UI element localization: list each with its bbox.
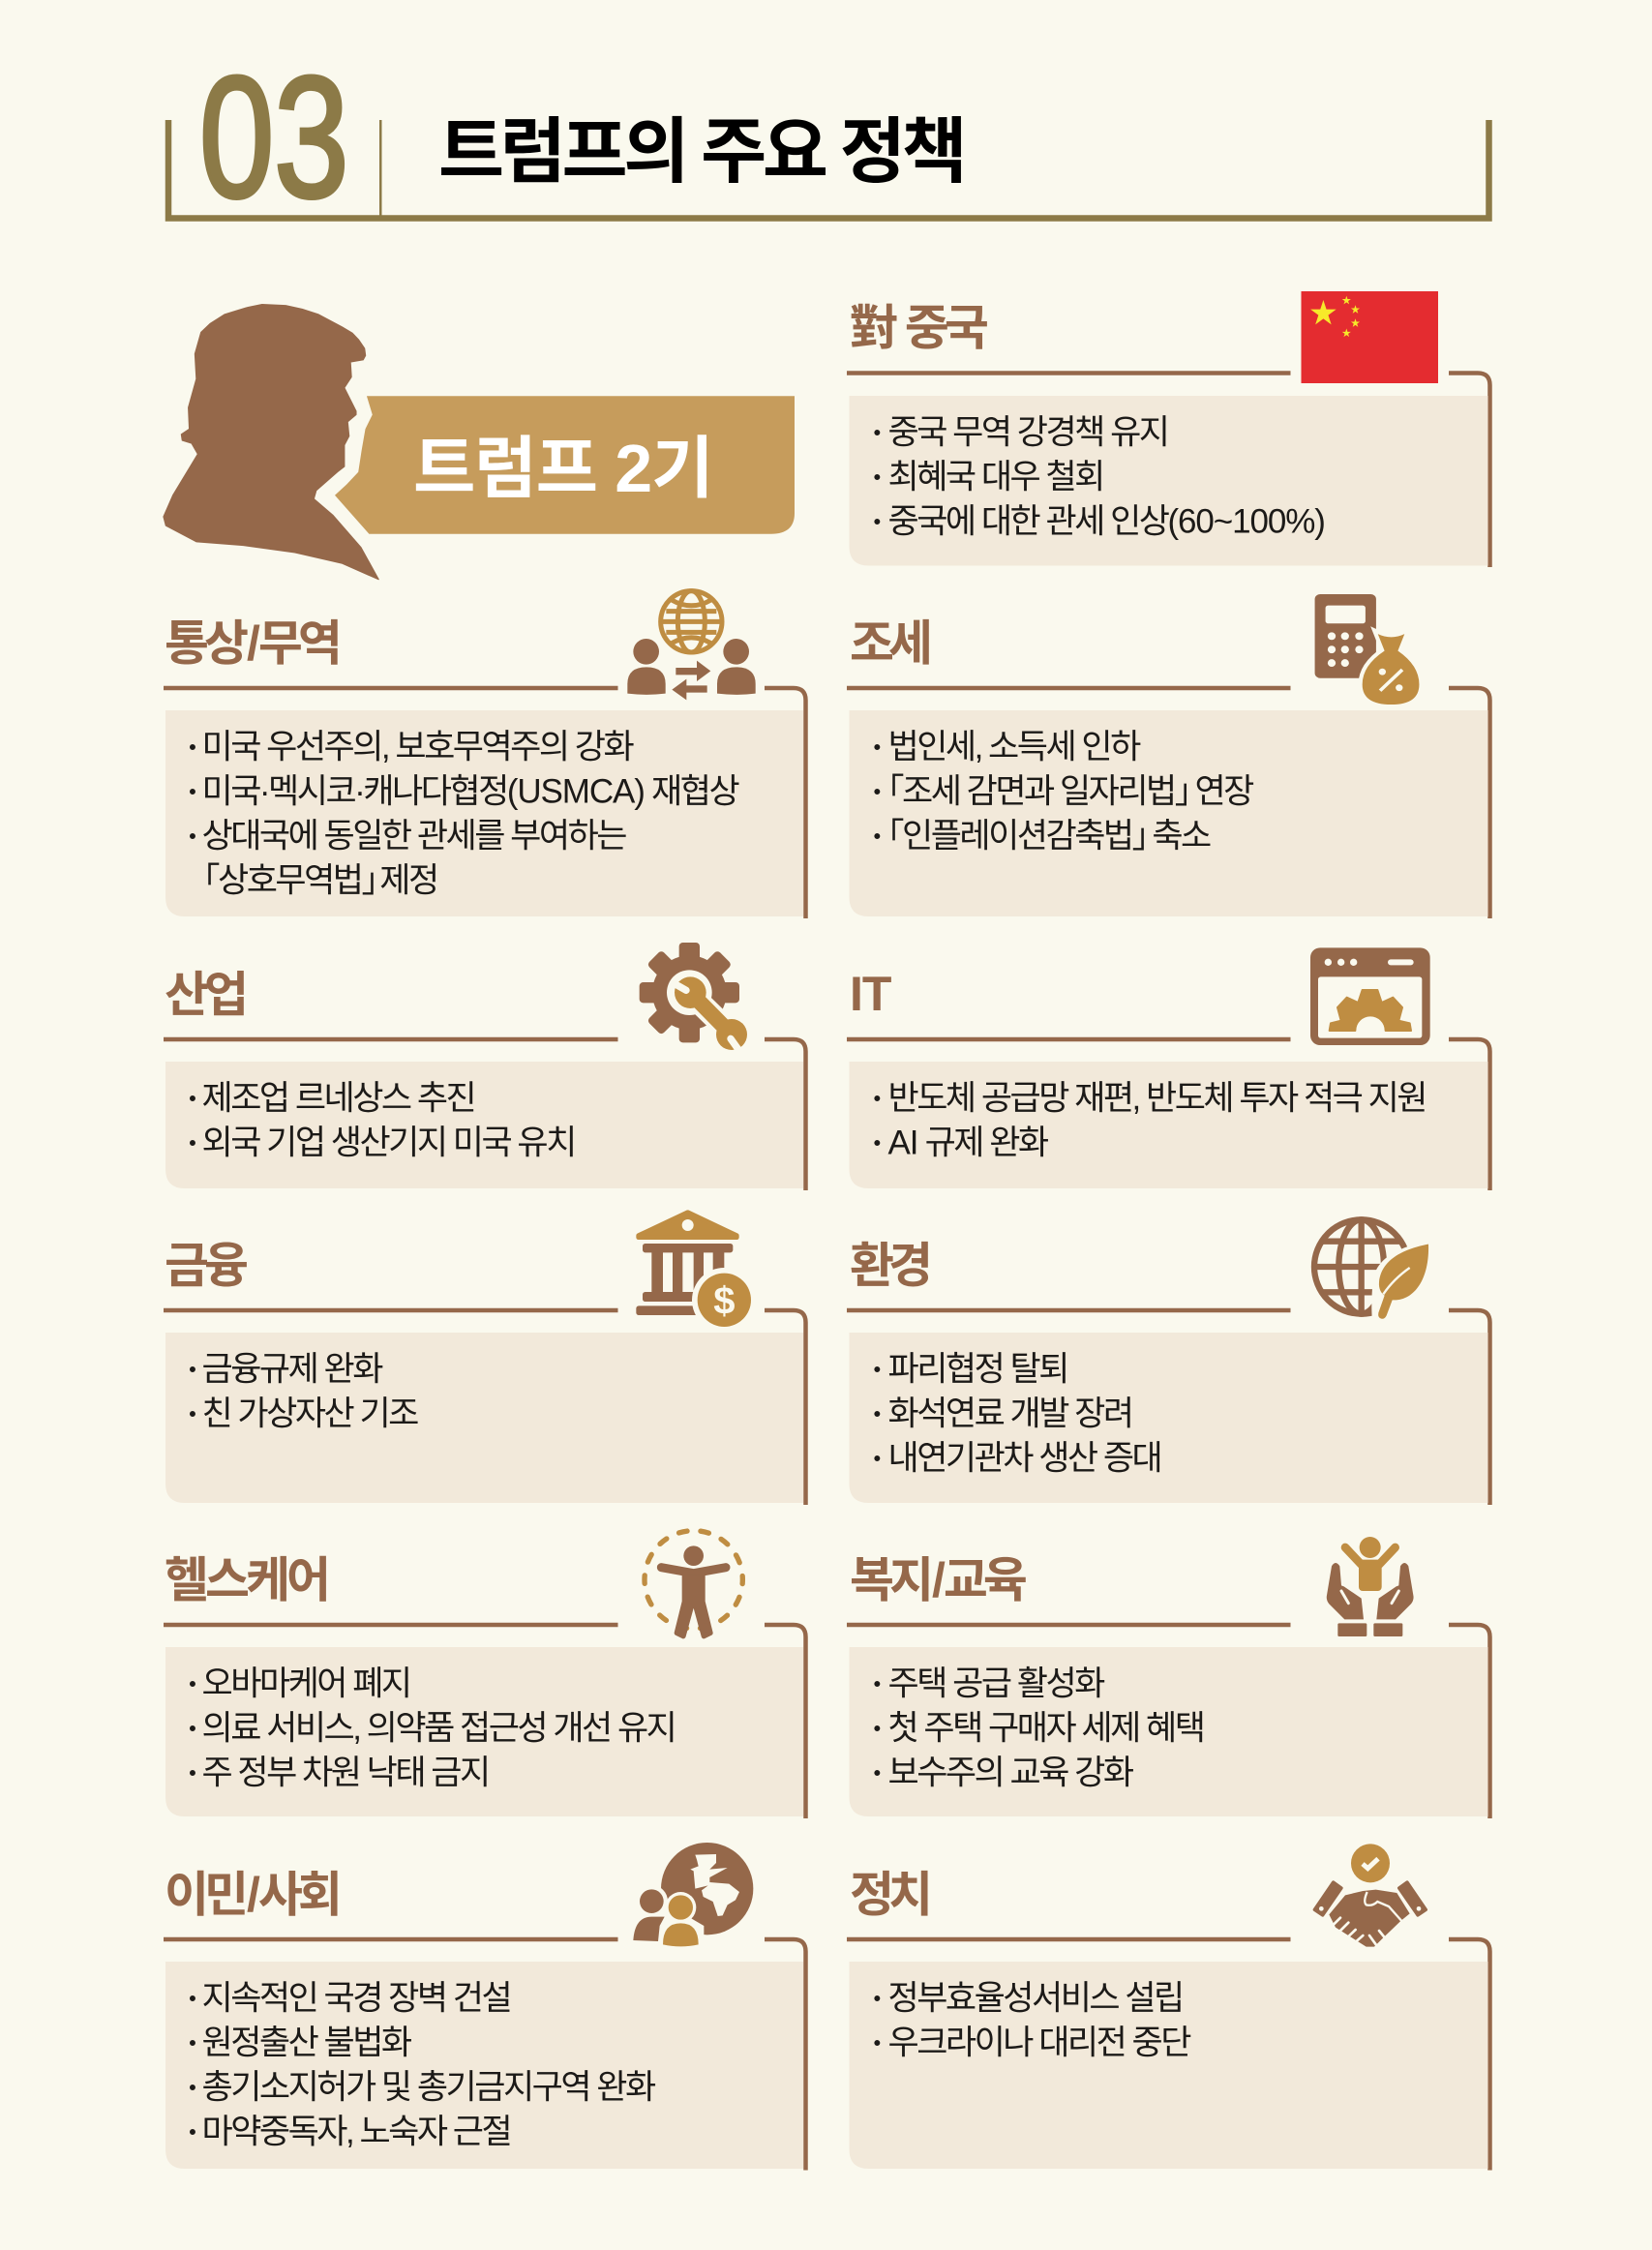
policy list: 지속적인 국경 장벽 건설 [201,1980,510,2017]
policy list: 「상호무역법」 제정 [186,861,437,900]
heading: 對 중국 [850,301,987,355]
icon: globe and people [628,1843,753,1952]
policy list: • [873,1401,881,1426]
panel: finance [164,1213,805,1505]
icon: gear and wrench [640,943,747,1050]
banner: Trump second term [164,305,795,580]
icon: globe and leaf [1314,1219,1432,1324]
panel: environment [847,1219,1490,1505]
policy list: 의료 서비스, 의약품 접근성 개선 유지 [201,1709,675,1748]
policy list: • [873,1446,881,1471]
text box [850,1962,1488,2169]
banner label: 트럼프 2기 [413,431,712,506]
policy list: 마약중독자, 노숙자 근절 [201,2114,510,2150]
panel: trade [164,591,805,918]
policy list: • [189,2030,196,2055]
heading: 정치 [850,1868,928,1922]
policy list: • [873,1761,881,1785]
policy list [873,1080,1426,1161]
panel: politics [847,1844,1490,2170]
policy list: 미국 우선주의, 보호무역주의 강화 [201,728,634,766]
policy list: • [873,2030,881,2055]
policy list: 금융규제 완화 [201,1351,383,1388]
heading: 헬스케어 [165,1553,327,1607]
policy list: • [873,465,881,490]
policy list: 주택 공급 활성화 [888,1665,1105,1703]
panel: industry [164,943,805,1190]
policy list: 오바마케어 폐지 [201,1665,410,1703]
policy list: • [873,735,881,759]
panel: IT [847,947,1490,1190]
text box [165,1962,803,2169]
policy list: 보수주의 교육 강화 [888,1754,1134,1792]
banner shape [335,396,795,534]
policy list: 제조업 르네상스 추진 [201,1080,474,1117]
policy list [189,1351,418,1432]
policy list: 첫 주택 구매자 세제 혜택 [888,1709,1203,1748]
policy list [873,1980,1190,2061]
icon: bank and coin: $ [713,1279,735,1322]
panel: welfare and education [847,1537,1490,1818]
policy list: • [189,1717,196,1740]
policy list [186,728,738,900]
heading rule [847,1310,1490,1505]
heading: 복지/교육 [850,1553,1026,1607]
panel: healthcare [164,1531,805,1818]
silhouette portrait [164,305,378,580]
icon: browser and gear [1310,947,1430,1045]
header [168,41,1488,233]
policy list: 상대국에 동일한 관세를 부여하는 [201,817,626,855]
policy list [189,1980,656,2150]
heading: 이민/사회 [165,1868,338,1922]
policy list: • [873,420,881,445]
policy list: 내연기관차 생산 증대 [888,1440,1160,1477]
policy list: 최혜국 대우 철회 [888,459,1103,495]
heading rule [164,1625,805,1818]
icon: bank and coin [636,1213,757,1333]
policy list: 총기소지허가 및 총기금지구역 완화 [201,2069,656,2106]
heading rule [847,1625,1490,1818]
policy list: 반도체 공급망 재편, 반도체 투자 적극 지원 [888,1080,1426,1117]
policy list: • [873,1986,881,2011]
policy list [871,728,1253,855]
policy list: • [189,1357,196,1382]
policy list: • [189,2075,196,2100]
icon: China flag [1301,291,1438,383]
policy list: • [873,1130,881,1155]
policy list [873,1665,1203,1792]
policy list [189,1665,675,1792]
icon: hands holding child [1327,1537,1414,1636]
text box [850,396,1488,565]
heading rule [164,1310,805,1505]
icon: calculator and money bag [1315,594,1419,705]
policy list: • [873,825,881,848]
header divider [379,120,381,217]
heading: IT [850,967,891,1021]
policy list: • [873,509,881,534]
policy list: • [189,1401,196,1426]
panel: China [847,291,1490,567]
panel: tax [847,594,1490,918]
policy list: 친 가상자산 기조 [201,1395,418,1432]
icon: human figure in dashed circle [645,1531,742,1636]
title: 트럼프의 주요 정책 [438,111,963,192]
policy list: 주 정부 차원 낙태 금지 [201,1754,489,1792]
policy list: 미국·멕시코·캐나다협정(USMCA) 재협상 [201,772,737,811]
policy list: 「조세 감면과 일자리법」 연장 [871,772,1252,811]
heading: 통상/무역 [165,616,338,671]
text box [165,1062,803,1188]
policy list: • [873,1086,881,1111]
section number: 03 [199,41,348,233]
policy list: • [189,735,196,759]
policy list: • [189,1761,196,1785]
heading rule [164,1039,805,1190]
policy list: AI 규제 완화 [888,1125,1047,1161]
heading: 금융 [165,1239,247,1293]
policy list: 원정출산 불법화 [201,2025,412,2061]
policy list: 정부효율성서비스 설립 [888,1980,1183,2017]
policy list: • [873,1717,881,1740]
policy list: 「인플레이션감축법」 축소 [871,817,1210,855]
text box [850,1333,1488,1503]
policy list: • [189,1130,196,1155]
policy list: • [189,1086,196,1111]
policy list: • [873,780,881,803]
policy list: • [189,1986,196,2011]
text box [165,1333,803,1503]
icon: globe and people [627,591,756,700]
policy list: 중국 무역 강경책 유지 [888,414,1167,451]
heading rule [847,1939,1490,2170]
text box [850,710,1488,916]
policy list [873,1351,1160,1477]
policy list: • [189,2119,196,2145]
policy list: • [189,825,196,848]
text box [850,1062,1488,1188]
policy list [873,414,1325,540]
heading rule [164,1939,805,2170]
header frame [168,120,1488,219]
policy list: 우크라이나 대리전 중단 [888,2025,1190,2061]
heading rule [847,688,1490,918]
panel: immigration and society [164,1843,805,2170]
heading rule [847,374,1490,567]
policy list: 파리협정 탈퇴 [888,1351,1067,1388]
policy list: • [189,780,196,803]
policy list: 화석연료 개발 장려 [888,1395,1132,1432]
policy list: • [189,1672,196,1695]
text box [165,1647,803,1816]
policy list: 중국에 대한 관세 인상(60~100%) [888,503,1325,540]
heading rule [164,688,805,918]
text box [165,710,803,916]
heading rule [847,1039,1490,1190]
policy list [189,1080,575,1161]
heading: 산업 [165,968,244,1022]
policy list: 법인세, 소득세 인하 [888,728,1141,766]
heading: 조세 [850,616,929,671]
heading: 환경 [850,1239,929,1293]
text box [850,1647,1488,1816]
policy list: 외국 기업 생산기지 미국 유치 [201,1125,575,1161]
policy list: • [873,1357,881,1382]
icon: handshake with check [1314,1844,1426,1947]
policy list: • [873,1672,881,1695]
